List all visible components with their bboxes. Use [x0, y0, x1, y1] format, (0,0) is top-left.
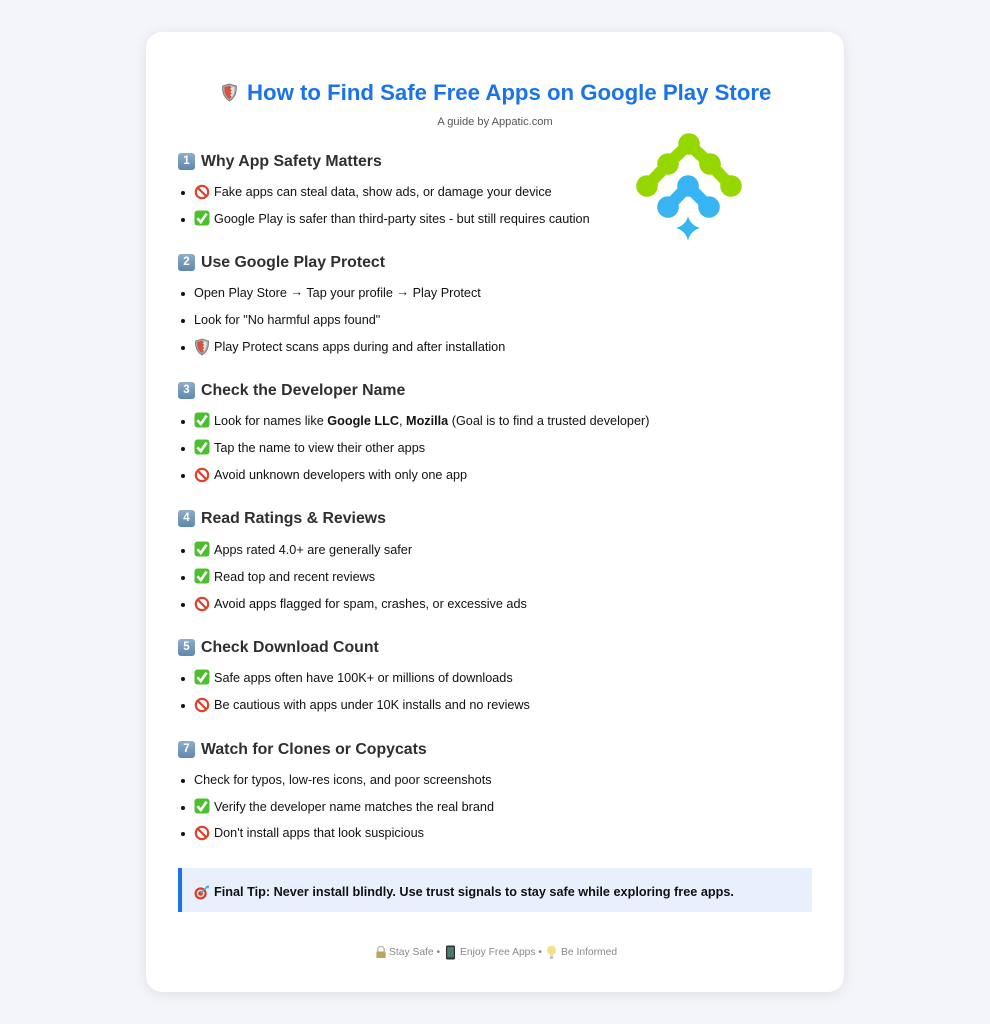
section 1 heading: Why App Safety Matters	[201, 153, 382, 170]
list item: low install caution: Be cautious with apps under 10K installs and no reviews	[214, 698, 530, 712]
section 3 number badge	[178, 382, 195, 399]
section 4 number badge: 4	[183, 512, 190, 524]
panel: guide card	[146, 32, 844, 992]
subtitle: A guide by Appatic.com	[437, 116, 553, 128]
section 5 heading: Check Download Count	[201, 639, 379, 656]
footer	[376, 946, 617, 960]
list item: open Play Store: Open Play Store → Tap your profile → Play Protect	[194, 285, 481, 300]
list item: read reviews: Read top and recent reviews	[214, 570, 375, 584]
panel: section 7, watch for clones	[178, 741, 494, 840]
section 1 number badge: 1	[183, 155, 190, 167]
section 4 number badge	[178, 510, 195, 527]
callout: final tip	[178, 868, 812, 912]
list item: rated 4.0+: Apps rated 4.0+ are generally safer	[214, 543, 412, 557]
list item: typos and low-res icons: Check for typos, low-res icons, and poor screenshots	[194, 773, 492, 787]
panel: section 4, read ratings and reviews	[178, 510, 527, 612]
list item: avoid unknown developers: Avoid unknown developers with only one app	[214, 468, 467, 482]
list item: trusted names: Look for names like Google LLC, Mozilla (Goal is to find a trusted developer)	[214, 414, 649, 428]
section 5 number badge	[178, 639, 195, 656]
panel: section 5, check download count	[178, 639, 530, 712]
list item: suspicious apps: Don't install apps that look suspicious	[214, 826, 424, 840]
panel: section 1, why app safety matters	[178, 153, 590, 226]
section 2 heading: Use Google Play Protect	[201, 254, 385, 271]
list item: no harmful apps: Look for "No harmful apps found"	[194, 313, 380, 327]
section 3 number badge: 3	[183, 384, 190, 396]
list item: verify developer: Verify the developer name matches the real brand	[214, 800, 494, 814]
title: How to Find Safe Free Apps on Google Play Store	[247, 80, 771, 105]
list item: tap the name: Tap the name to view their other apps	[214, 441, 425, 455]
section 3 heading: Check the Developer Name	[201, 382, 405, 399]
icon: lock	[376, 946, 386, 958]
icon: phone	[446, 946, 455, 960]
section 2 number badge	[178, 254, 195, 271]
section 7 number badge: 7	[183, 743, 190, 755]
section 4 heading: Read Ratings & Reviews	[201, 510, 386, 527]
list item: play protect scans: Play Protect scans apps during and after installation	[214, 340, 505, 354]
footer label: enjoy free apps: Enjoy Free Apps •	[460, 947, 542, 958]
footer label: stay safe: Stay Safe •	[389, 947, 440, 958]
icon: shield in title	[222, 84, 237, 102]
section 5 number badge: 5	[183, 641, 190, 653]
panel: section 2, use Google Play Protect	[178, 254, 505, 356]
panel: section 3, check the developer name	[178, 382, 649, 482]
section 7 number badge	[178, 741, 195, 758]
list item: Google Play safer: Google Play is safer than third-party sites - but still requires caution	[214, 212, 590, 226]
list item: safe download counts: Safe apps often have 100K+ or millions of downloads	[214, 671, 513, 685]
icon: light bulb	[547, 946, 556, 959]
section 1 number badge	[178, 153, 195, 170]
tip text: Final Tip: Never install blindly. Use trust signals to stay safe while exploring free apps.	[214, 885, 734, 899]
footer label: be informed: Be Informed	[561, 947, 617, 958]
icon: target	[194, 886, 209, 900]
section 2 number badge: 2	[183, 256, 190, 268]
list item: avoid flagged apps: Avoid apps flagged for spam, crashes, or excessive ads	[214, 597, 527, 611]
section 7 heading: Watch for Clones or Copycats	[201, 741, 427, 758]
list item: fake apps: Fake apps can steal data, show ads, or damage your device	[214, 185, 552, 199]
icon: Appatic logo	[636, 133, 742, 241]
